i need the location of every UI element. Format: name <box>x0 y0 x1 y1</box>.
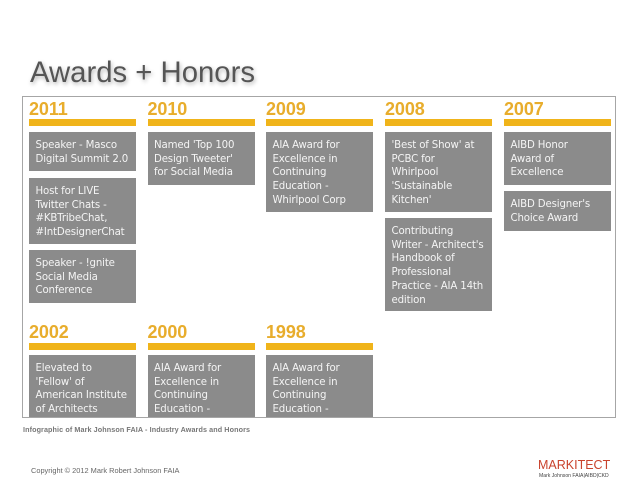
year 2000: 2000 <box>148 322 187 342</box>
card: Best of Show <box>385 132 492 212</box>
caption: Infographic of Mark Johnson FAIA - Industry Awards and Honors <box>23 425 250 434</box>
card: Whirlpool AIA award: AIA Award for Excellence in Continuing Education - Whirlpool Corp <box>272 140 346 206</box>
card: AIBD Designer's Choice <box>504 191 611 231</box>
card: AIA Award 2000: AIA Award for Excellence in Continuing Education - <box>154 363 221 415</box>
card: Twitter chats: Host for LIVE Twitter Chats - #KBTribeChat, #IntDesignerChat <box>36 186 125 238</box>
year 2008: 2008 <box>385 99 425 119</box>
card: AIBD Honor: AIBD Honor Award of Excellence <box>510 140 568 178</box>
card: Whirlpool AIA award <box>266 132 373 212</box>
card: Top 100 <box>148 132 254 185</box>
column: 1998 <box>266 322 373 417</box>
card: Fellow: Elevated to 'Fellow' of American Institute of Architects <box>36 363 127 415</box>
year bar <box>504 119 611 126</box>
card: Ignite: Speaker - !gnite Social Media Conference <box>36 258 115 296</box>
copyright: Copyright © 2012 Mark Robert Johnson FAIA <box>31 466 179 475</box>
card: Twitter chats <box>29 178 136 244</box>
card: AIA Award 1998: AIA Award for Excellence in Continuing Education - <box>272 363 340 415</box>
card: AIBD Designer's Choice: AIBD Designer's Choice Award <box>510 199 590 224</box>
year 2002: 2002 <box>29 322 69 342</box>
year 1998: 1998 <box>266 322 306 342</box>
card: Masco <box>29 132 136 171</box>
year bar <box>266 343 373 350</box>
year bar <box>29 119 136 126</box>
card: AIA Award 1998 <box>266 355 373 417</box>
logo: Markitect <box>538 458 610 479</box>
year bar <box>385 119 492 126</box>
year bar <box>148 343 254 350</box>
year 2007: 2007 <box>504 99 544 119</box>
card: Masco: Speaker - Masco Digital Summit 2.0 <box>36 140 128 165</box>
column: 2011 <box>29 99 136 303</box>
card: Contributing Writer: Contributing Writer - Architect's Handbook of Professional Practice - AIA 14th edition <box>392 226 484 306</box>
year 2010: 2010 <box>148 99 187 119</box>
year bar <box>148 119 254 126</box>
column: 2002 <box>29 322 136 417</box>
card: AIA Award 2000 <box>148 355 254 417</box>
card: AIBD Honor <box>504 132 611 185</box>
year bar <box>266 119 373 126</box>
panel: awards timeline <box>22 96 616 418</box>
logo subtitle: Mark Johnson FAIA|AIBD|CKD <box>539 473 609 479</box>
column: 2007 <box>504 99 611 231</box>
year 2009: 2009 <box>266 99 306 119</box>
title: Awards + Honors <box>30 56 255 89</box>
column: 2009 <box>266 99 373 212</box>
logo wordmark: MARKITECT <box>538 458 610 472</box>
card: Ignite <box>29 250 136 303</box>
card: Top 100: Named 'Top 100 Design Tweeter' for Social Media <box>154 140 234 178</box>
card: Best of Show: 'Best of Show' at PCBC for Whirlpool 'Sustainable Kitchen' <box>392 140 474 206</box>
year bar <box>29 343 136 350</box>
year 2011: 2011 <box>29 99 68 119</box>
column: 2000 <box>148 322 255 417</box>
column: 2008 <box>385 99 492 311</box>
column: 2010 <box>148 99 255 185</box>
